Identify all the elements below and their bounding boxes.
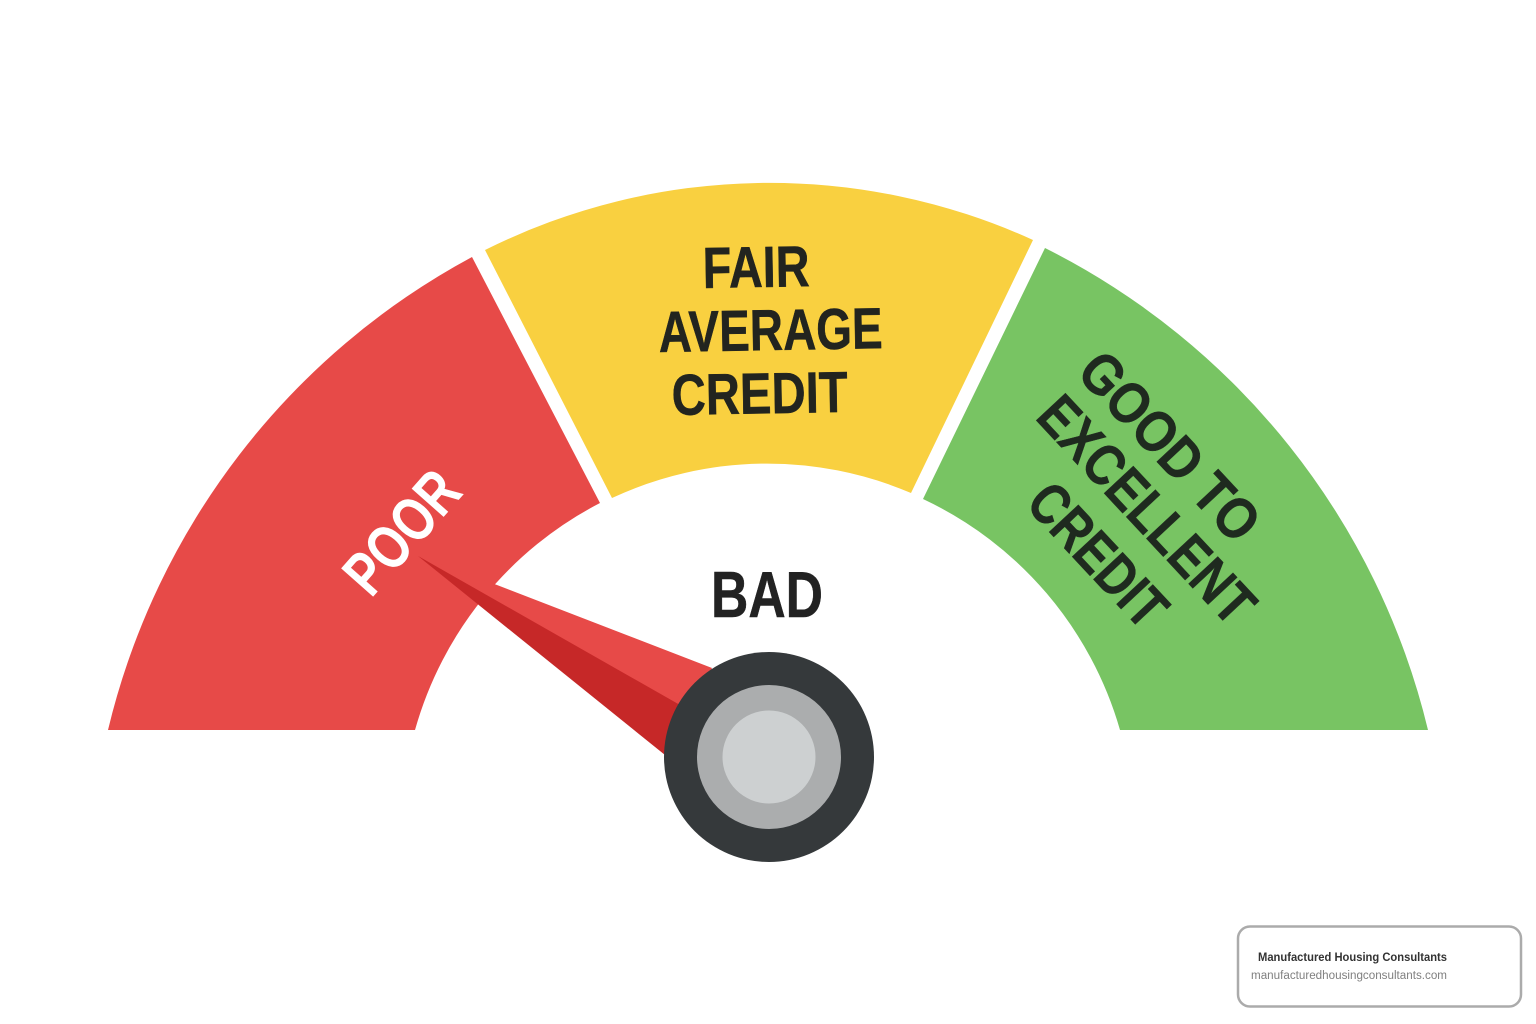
- label: poor: POOR: [330, 457, 475, 608]
- label: good to excellent credit: GOOD TO: [1065, 339, 1273, 555]
- label: good to excellent credit: EXCELLENT: [1024, 383, 1268, 637]
- label: good to excellent credit: [1014, 339, 1273, 641]
- gauge segment: poor (red): [108, 257, 600, 730]
- company name: Manufactured Housing Consultants: [1258, 950, 1447, 964]
- needle hub: [664, 652, 874, 862]
- label: fair average credit: AVERAGE: [658, 296, 883, 365]
- label: fair average credit: CREDIT: [671, 360, 848, 428]
- website: manufacturedhousingconsultants.com: [1251, 970, 1447, 982]
- label: fair average credit: [658, 234, 883, 428]
- gauge segment: good to excellent (green): [923, 248, 1428, 730]
- label: fair average credit: FAIR: [702, 234, 810, 301]
- gauge needle: [418, 556, 712, 760]
- label: good to excellent credit: CREDIT: [1014, 470, 1181, 641]
- gauge segment: fair (yellow): [485, 183, 1033, 498]
- label: bad: BAD: [711, 558, 823, 631]
- source card: [1238, 926, 1521, 1006]
